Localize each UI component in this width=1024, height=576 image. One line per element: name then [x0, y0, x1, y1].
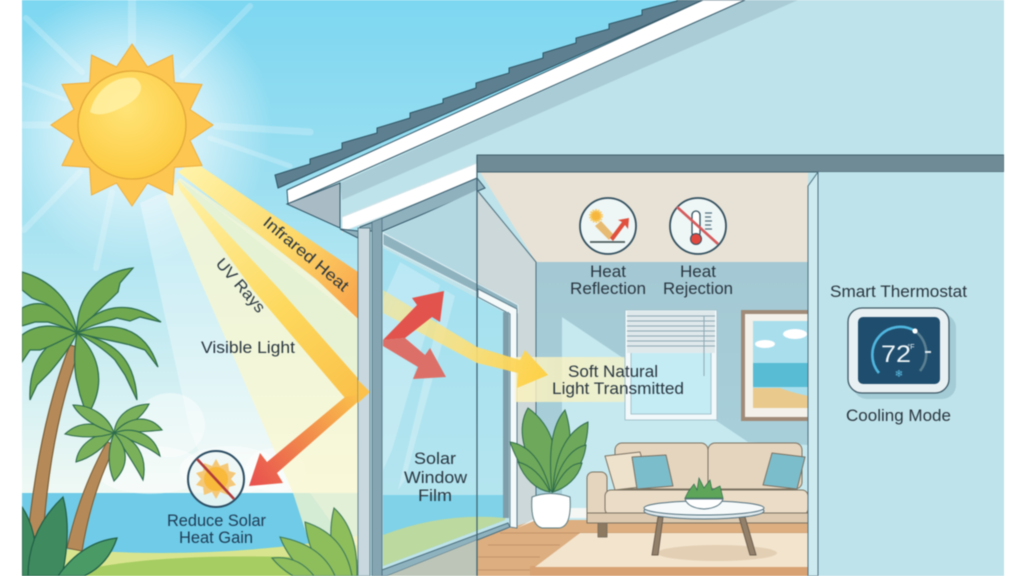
beam [477, 155, 1004, 172]
white strip [342, 163, 477, 232]
icon: heat reflection [580, 198, 636, 254]
roof fascia [287, 0, 745, 204]
sun rays [24, 0, 310, 268]
table plant [685, 478, 723, 509]
house wall [288, 0, 1004, 576]
label: heat reflection: Heat [590, 262, 626, 281]
beach [22, 535, 362, 576]
eave underside [287, 183, 340, 228]
ceiling [480, 172, 808, 262]
palm tree: large [22, 268, 161, 538]
label: soft natural light transmitted: Light Transmitted [552, 379, 684, 398]
label: UV rays: UV Rays [212, 255, 268, 316]
floor [477, 520, 808, 576]
baseboard [517, 508, 590, 528]
palm tree: small [65, 404, 162, 551]
label: heat rejection: Heat [680, 262, 716, 281]
reflected red arrows [383, 291, 446, 379]
label: heat rejection: Rejection [663, 279, 733, 298]
label: smart thermostat: Smart Thermostat [830, 282, 967, 301]
door frame [358, 155, 518, 576]
foreground plants right [272, 508, 357, 576]
infrared heat beam [178, 161, 358, 319]
label: visible light: Visible Light [201, 338, 295, 357]
label: reduce solar heat gain [167, 511, 266, 547]
thermostat: 72 [881, 341, 911, 368]
label: reduce solar heat gain: Reduce Solar [167, 511, 266, 530]
blinds window [625, 310, 717, 420]
thermostat: ❄ [895, 369, 903, 380]
floor plant [510, 408, 588, 528]
roof shadow [340, 0, 798, 200]
label: solar window film [404, 449, 468, 505]
soft light band [515, 357, 695, 402]
visible light beam [140, 178, 358, 560]
painting [741, 310, 811, 421]
side wall [477, 190, 536, 528]
label: soft natural light transmitted [552, 362, 684, 398]
sunlight patch [562, 317, 808, 530]
room back wall [516, 262, 808, 524]
clouds [95, 393, 305, 494]
rug [535, 533, 808, 567]
label: solar window film: Window [404, 468, 468, 487]
sea [22, 493, 362, 553]
label: heat reflection: Reflection [570, 279, 646, 298]
label: heat reflection [570, 262, 646, 298]
sun glow [0, 0, 272, 265]
sliding door glass [383, 190, 505, 566]
transmitted light arrow [383, 290, 548, 388]
label: solar window film: Solar [414, 449, 456, 468]
sun [51, 44, 213, 206]
label: heat rejection [663, 262, 733, 298]
reflected heat arrow [249, 392, 369, 486]
foreground plants left [22, 497, 117, 576]
right wall panel [808, 172, 1004, 576]
coffee table [644, 501, 777, 561]
roof tiles [275, 0, 703, 188]
label: cooling mode: Cooling Mode [846, 406, 951, 425]
label: solar window film: Film [418, 486, 452, 505]
thermostat [848, 308, 956, 399]
label: reduce solar heat gain: Heat Gain [179, 528, 253, 547]
icon: reduce solar heat gain [188, 451, 244, 507]
UV rays beam [176, 178, 370, 398]
label: soft natural light transmitted: Soft Natural [568, 362, 658, 381]
frame under eave [340, 178, 485, 238]
thermostat: °F [907, 343, 915, 351]
sofa [587, 443, 808, 537]
label: infrared heat: Infrared Heat [259, 214, 352, 296]
icon: heat rejection [670, 198, 726, 254]
UV beam bend tip [358, 380, 370, 403]
